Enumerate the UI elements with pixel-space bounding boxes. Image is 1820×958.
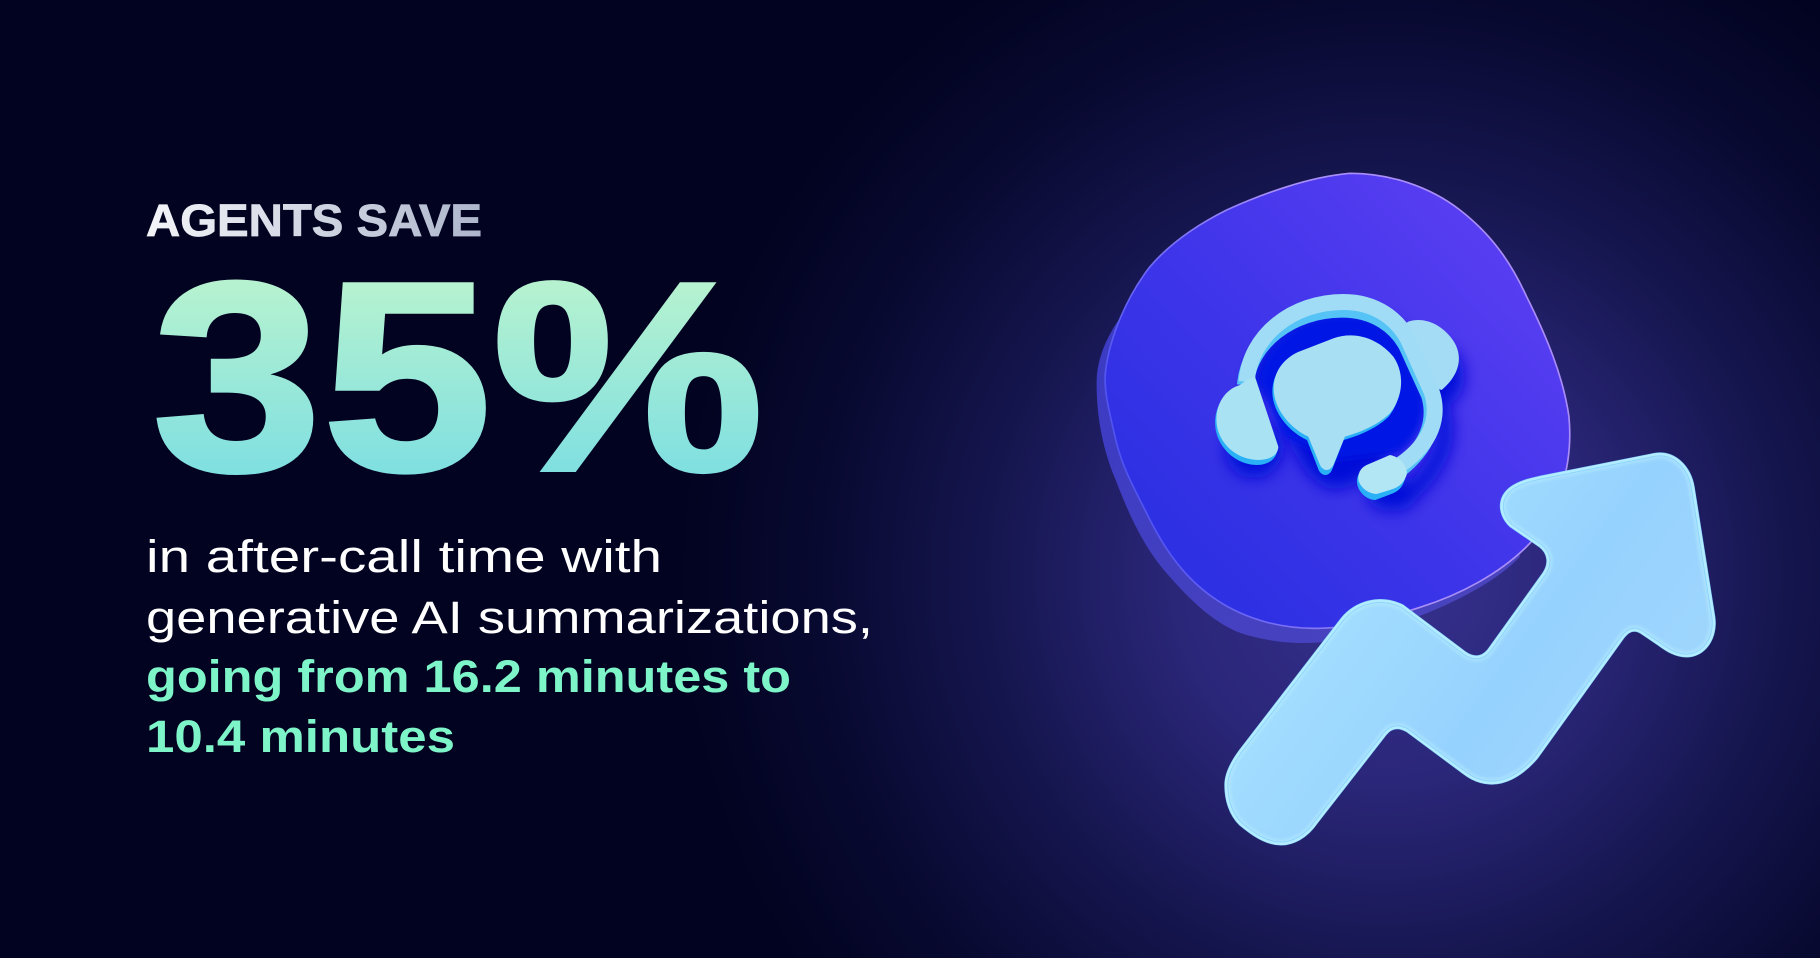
headset band [1247, 302, 1435, 465]
left earcup [1216, 377, 1278, 460]
description text block [146, 531, 873, 762]
illustration: blue blob badge with headset [1097, 173, 1570, 643]
headset icon side depth [1215, 309, 1432, 500]
blob top surface [1105, 173, 1570, 628]
heading: agents save: AGENTS SAVE [146, 195, 482, 246]
big statistic: 35%: 35% [152, 227, 764, 528]
right earcup [1397, 320, 1459, 390]
description text block: in after-call time with [146, 531, 662, 582]
speech bubble [1274, 335, 1401, 470]
arrow body [1225, 453, 1715, 845]
inner deep-blue recess of headset [1258, 315, 1425, 460]
microphone [1358, 455, 1407, 494]
blob lower layer [1097, 283, 1520, 643]
description text block: going from 16.2 minutes to [146, 651, 791, 702]
description text block: 10.4 minutes [146, 711, 455, 762]
headset shadow [1226, 323, 1464, 511]
illustration: rising arrow [1225, 453, 1715, 845]
arrow inner rim highlight [1225, 453, 1715, 845]
description text block: generative AI summarizations, [146, 592, 873, 643]
